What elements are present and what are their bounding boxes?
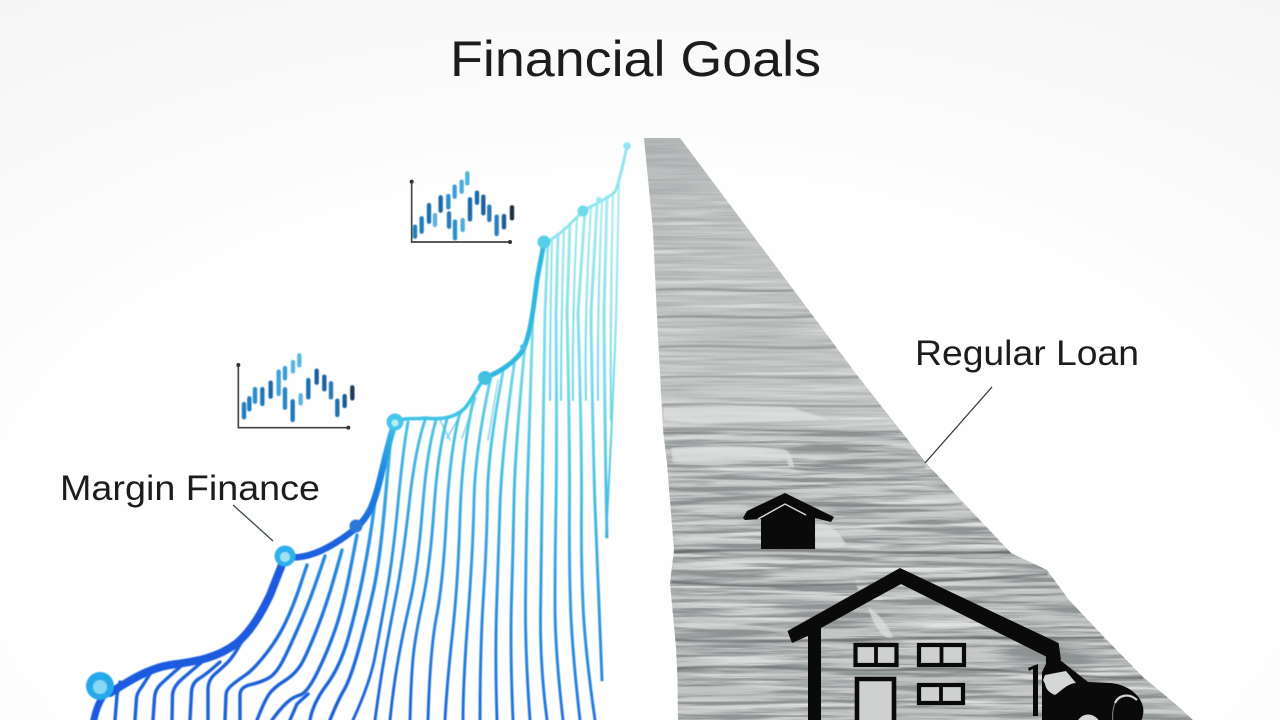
roof and walls <box>788 568 1061 720</box>
title: Financial Goals <box>450 31 821 87</box>
panel: margin finance growth curve <box>86 142 631 720</box>
icon: large house <box>788 568 1061 720</box>
panel: regular loan road <box>640 130 1210 720</box>
icon: candlestick chart upper <box>410 173 512 244</box>
leader line: Regular Loan <box>925 387 992 463</box>
icon: small house <box>743 493 834 549</box>
icon: candlestick chart lower <box>236 355 352 430</box>
lower right window <box>919 685 963 703</box>
milestone nodes <box>86 142 631 700</box>
strands below the curve <box>115 180 619 720</box>
curve line <box>93 146 627 720</box>
door <box>857 679 894 720</box>
leader line: Margin Finance <box>233 505 273 541</box>
label: Regular Loan: Regular Loan <box>915 334 1139 373</box>
icon: car <box>1028 642 1143 720</box>
upper right window <box>919 645 964 665</box>
upper left window <box>856 645 896 665</box>
label: Margin Finance: Margin Finance <box>60 469 320 508</box>
